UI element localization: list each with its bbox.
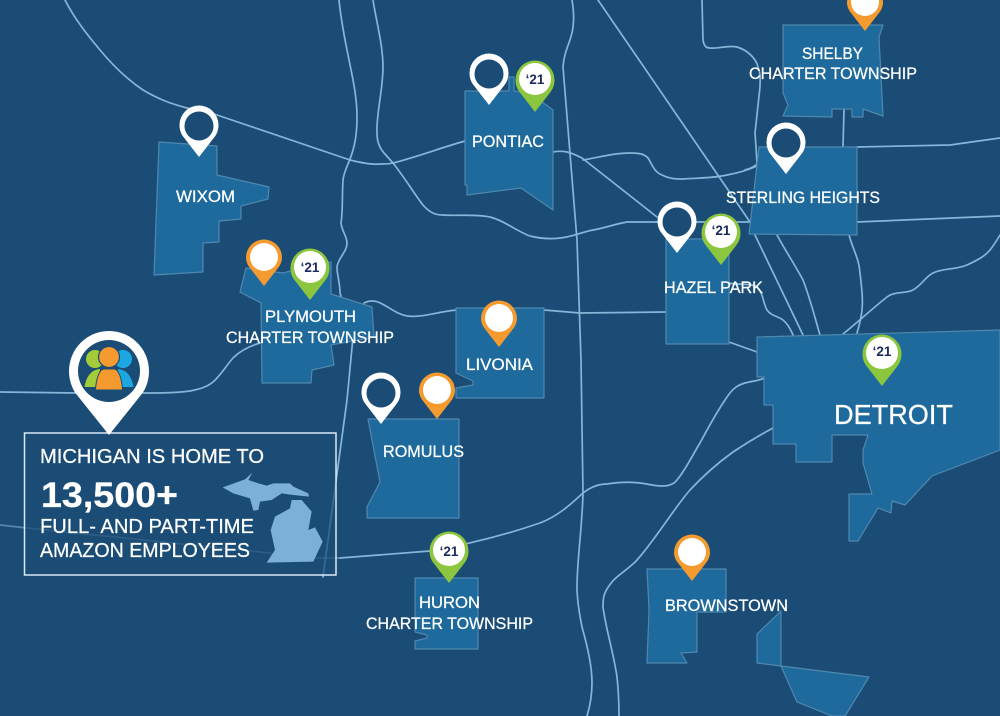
- label: Romulus: ROMULUS: [383, 443, 464, 461]
- pin: large people pin: [69, 331, 149, 435]
- pin: Romulus orange: [419, 372, 455, 419]
- region: Romulus: [367, 419, 459, 518]
- pin: Romulus: [362, 372, 400, 424]
- text: Amazon employees: AMAZON EMPLOYEES: [40, 540, 250, 562]
- region: Shelby: [783, 25, 883, 117]
- region: Sterling Heights: [749, 147, 857, 235]
- label: Wixom: WIXOM: [176, 188, 235, 206]
- region: Pontiac: [465, 77, 553, 210]
- pin: Plymouth orange: [246, 240, 282, 286]
- label: Hazel Park: HAZEL PARK: [664, 279, 763, 297]
- region: Brownstown: [647, 569, 726, 663]
- label: Shelby Charter Township: [749, 45, 917, 83]
- label: Shelby Charter Township: CHARTER TOWNSHIP: [749, 65, 917, 83]
- region: Plymouth: [240, 262, 374, 383]
- label: Plymouth Charter Township: [226, 308, 394, 347]
- pin: Pontiac 2021: [516, 60, 554, 112]
- label: Brownstown: BROWNSTOWN: [665, 597, 788, 615]
- label: Plymouth Charter Township: CHARTER TOWNSHIP: [226, 329, 394, 347]
- pin: Hazel Park 2021: [702, 214, 740, 265]
- icon: people group: [84, 346, 134, 390]
- text: full- and part-time: FULL- AND PART-TIME: [40, 516, 254, 538]
- stat: 13,500+: 13,500+: [41, 476, 178, 515]
- region: south area north part: [757, 611, 781, 666]
- pin: Sterling Heights: [766, 122, 806, 174]
- label: Shelby Charter Township: SHELBY: [802, 45, 863, 63]
- label: Pontiac: PONTIAC: [472, 133, 544, 151]
- pin: Hazel Park 2021: ‘21: [712, 223, 731, 238]
- label: Huron Charter Township: HURON: [419, 594, 480, 612]
- label: Livonia: LIVONIA: [466, 356, 533, 374]
- pin: Detroit 2021: ‘21: [873, 344, 892, 359]
- pin: Shelby orange: [847, 0, 883, 31]
- label: Sterling Heights: STERLING HEIGHTS: [726, 189, 880, 207]
- icon: Michigan state: [223, 473, 323, 563]
- pin: Livonia orange: [481, 300, 517, 347]
- region: Hazel Park: [666, 239, 729, 344]
- pin: Huron 2021: [430, 532, 468, 583]
- pin: Wixom: [180, 106, 218, 157]
- heading: Michigan is home to: MICHIGAN IS HOME TO: [40, 446, 264, 468]
- region: Detroit: [757, 330, 1000, 541]
- region: Wixom: [154, 142, 269, 275]
- label: Detroit: DETROIT: [834, 399, 953, 430]
- label: Huron Charter Township: [366, 594, 533, 633]
- pin: Detroit 2021: [862, 334, 902, 386]
- pin: Pontiac 2021: ‘21: [526, 72, 545, 87]
- label: Plymouth Charter Township: PLYMOUTH: [265, 308, 356, 326]
- label: Huron Charter Township: CHARTER TOWNSHIP: [366, 615, 533, 633]
- pin: Huron 2021: ‘21: [440, 544, 459, 559]
- callout border: [24, 433, 336, 575]
- pin: Hazel Park: [658, 202, 696, 253]
- pin: Plymouth 2021: [290, 248, 330, 300]
- region: Livonia: [456, 308, 544, 398]
- pin: Brownstown orange: [674, 534, 710, 581]
- region: Huron: [415, 578, 478, 649]
- pin: Plymouth 2021: ‘21: [301, 260, 320, 275]
- pin: Pontiac: [470, 54, 508, 105]
- callout: Michigan employees: [24, 433, 336, 575]
- region: south area south part: [781, 666, 869, 716]
